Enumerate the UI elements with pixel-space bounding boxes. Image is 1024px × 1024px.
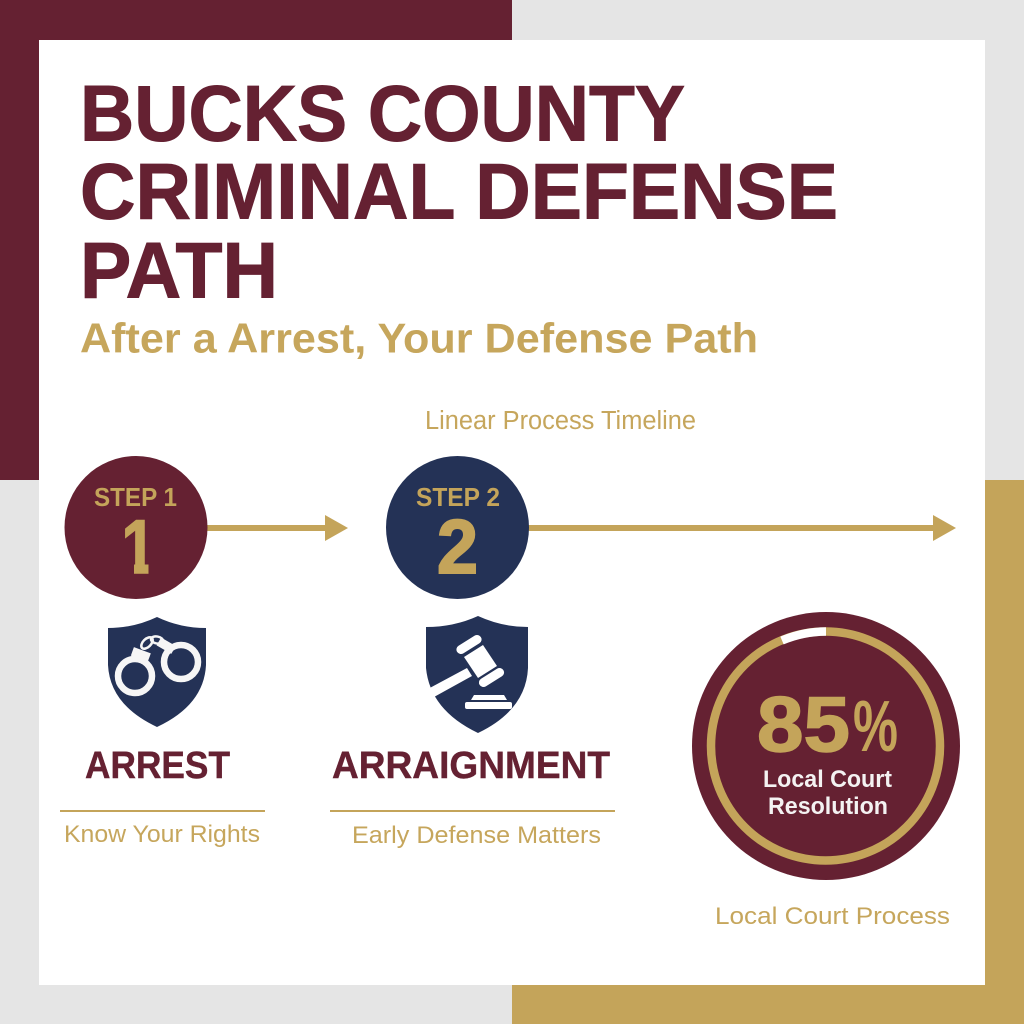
title <box>80 68 838 314</box>
caption: know your rights: Know Your Rights <box>64 821 260 848</box>
title: BUCKS COUNTY <box>80 68 685 158</box>
icon: handcuffs shield <box>108 617 206 727</box>
label: arrest: ARREST <box>85 745 230 787</box>
icon: gavel shield <box>426 616 528 733</box>
corner block: maroon top left <box>0 0 512 480</box>
title: PATH <box>80 226 278 314</box>
stat: 85 percent local court resolution: % <box>853 687 898 767</box>
step 2 badge <box>386 456 529 599</box>
stat: 85 percent local court resolution: 85 <box>757 680 850 768</box>
caption: local court process: Local Court Process <box>715 903 950 930</box>
step 2 badge: STEP 2 <box>416 484 500 512</box>
stat: 85 percent local court resolution: Local Court <box>763 766 892 793</box>
label: arraignment: ARRAIGNMENT <box>332 745 610 787</box>
stat: 85 percent local court resolution: Resolution <box>768 793 888 820</box>
stat: 85 percent local court resolution <box>692 612 960 880</box>
timeline label: Linear Process Timeline <box>425 407 696 435</box>
title: CRIMINAL DEFENSE <box>80 146 838 236</box>
subtitle: After a Arrest, Your Defense Path <box>80 314 758 362</box>
arrow: step 2 onward <box>526 515 956 541</box>
caption: early defense matters: Early Defense Matters <box>352 822 601 849</box>
step 1 badge <box>64 456 208 599</box>
step 1 badge: STEP 1 <box>94 484 177 512</box>
corner block: gold bottom right <box>512 480 1024 1024</box>
step 2 badge: 2 <box>437 505 478 590</box>
arrow: step 1 to step 2 <box>205 515 348 541</box>
step 1 badge: 1 <box>122 505 156 590</box>
divider: arrest <box>60 810 265 812</box>
divider: arraignment <box>330 810 615 812</box>
